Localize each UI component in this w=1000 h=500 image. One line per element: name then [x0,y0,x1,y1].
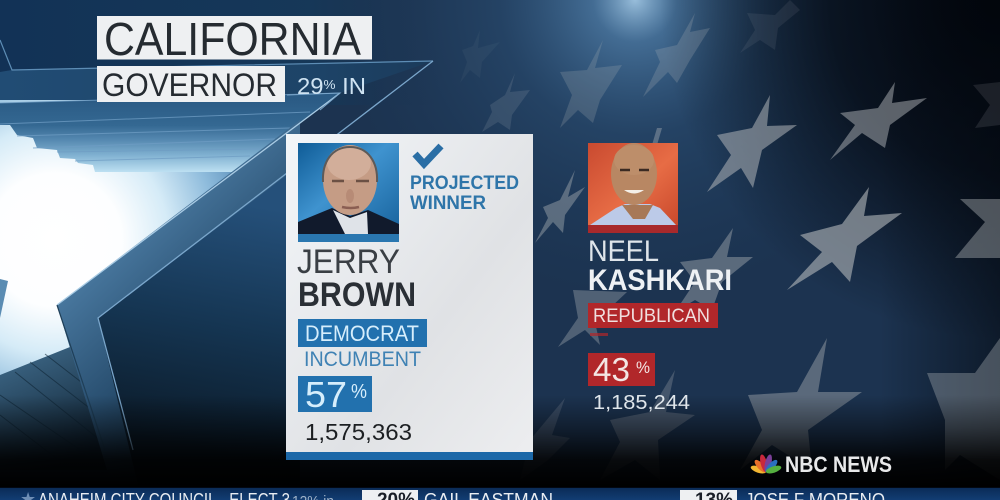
icon: check mark [415,146,441,164]
label: projected winner: PROJECTED [410,173,519,194]
label: projected winner: WINNER [410,193,486,214]
vote share: 43% [588,351,655,388]
vote share: 43%: % [636,358,650,377]
vote share: 57%: % [351,381,367,403]
candidate name: Neel Kashkari [588,235,732,297]
ticker: Gail Eastman result [362,490,553,500]
icon: NBC peacock [750,454,782,475]
title: California: CALIFORNIA [104,13,361,65]
bottom fade to black [0,395,1000,488]
portrait: Neel Kashkari [588,143,678,233]
party badge: Republican: REPUBLICAN [593,306,710,327]
background: left geometric light panels [0,0,440,485]
label: incumbent: INCUMBENT [304,348,421,371]
ticker: Jose F Moreno result [680,490,885,500]
precincts reporting: 29% in: IN [336,73,366,99]
subtitle: Governor: GOVERNOR [102,67,277,103]
panel: winner card, Jerry Brown [286,134,533,460]
candidate name: Neel Kashkari: KASHKARI [588,264,732,297]
candidate name: Jerry Brown: BROWN [298,276,416,314]
party badge: Democrat: DEMOCRAT [305,321,419,346]
candidate name: Jerry Brown [297,243,416,314]
logo: NBC News [750,452,892,477]
portrait: Jerry Brown [298,143,399,242]
vote share: 57% [298,374,372,415]
precincts reporting: 29% in: % [324,77,336,92]
vote count: 1,575,363: 1,575,363 [305,419,412,445]
title block [97,13,372,103]
vote share: 57%: 57 [305,374,347,415]
vote count: 1,185,244: 1,185,244 [593,392,690,414]
candidate name: Jerry Brown: JERRY [297,243,400,281]
panel: challenger, Neel Kashkari [588,143,732,414]
candidate name: Neel Kashkari: NEEL [588,235,659,268]
label: projected winner [410,173,519,214]
news ticker [0,487,1000,500]
precincts reporting: 29% in: 29 [297,73,323,99]
vote share: 43%: 43 [593,351,630,388]
wordmark: NBC News: NBC NEWS [785,452,892,477]
